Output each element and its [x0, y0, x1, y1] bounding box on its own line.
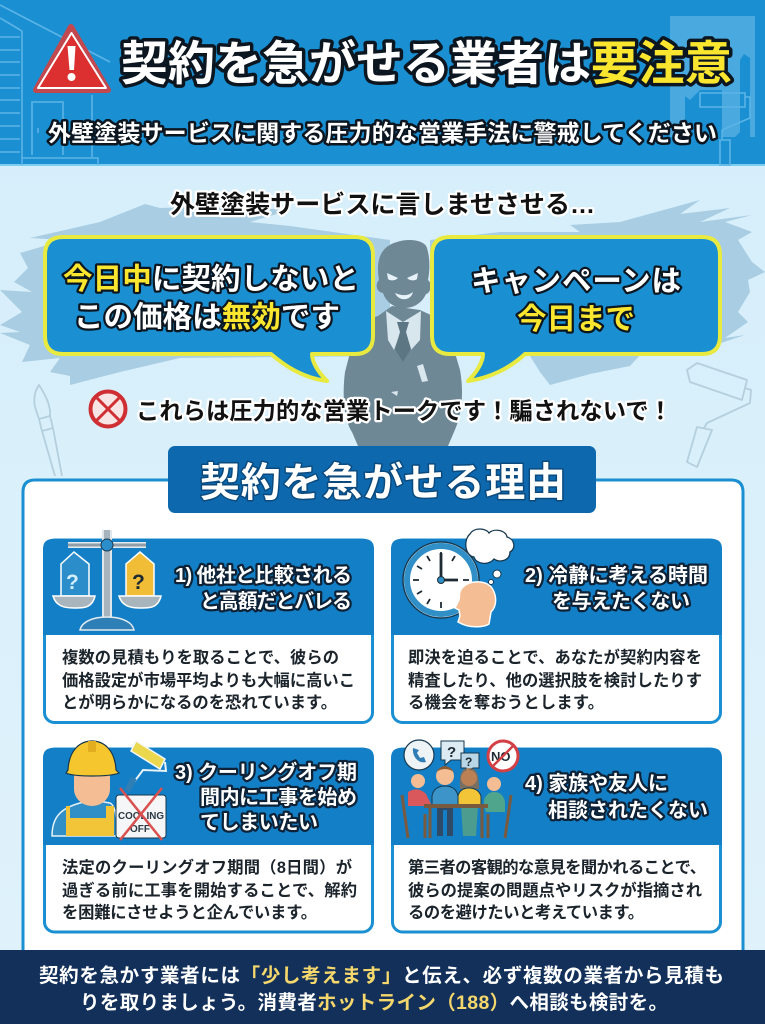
icon: warning triangle	[36, 27, 108, 90]
icon: balance scale	[53, 530, 161, 630]
icon: balance scale: ?	[132, 571, 145, 594]
card 4 body	[408, 858, 706, 922]
card 2 body: 精査したり、他の選択肢を検討したりす	[408, 671, 702, 690]
icon: paint brush outline	[34, 385, 62, 476]
card 3 title: てしまいたい	[200, 812, 318, 834]
card 3 body: 過ぎる前に工事を開始することで、解約	[62, 881, 357, 900]
subtitle: 外壁塗装サービスに関する圧力的な営業手法に警戒してください	[48, 120, 717, 146]
card 2 title: 2) 冷静に考える時間	[525, 564, 708, 587]
card 2 title	[525, 564, 708, 613]
card 3 title: 間内に工事を始め	[200, 786, 357, 809]
heading: reasons	[168, 446, 596, 513]
card 1 body	[62, 648, 355, 712]
card 2 body: 即決を迫ることで、あなたが契約内容を	[408, 648, 702, 667]
bubble text: right line 2: 今日まで	[517, 303, 635, 336]
bubble text: right line 1: キャンペーンは	[471, 265, 681, 298]
icon: clock with thinking head	[403, 529, 514, 627]
card 3 body: を困難にさせようと企んでいます。	[62, 903, 317, 922]
panel: header band	[0, 0, 765, 166]
card 2 title: を与えたくない	[552, 590, 690, 613]
card 4 body: るのを避けたいと考えています。	[408, 903, 644, 922]
card 1	[43, 530, 374, 722]
card 4 body: 彼らの提案の問題点やリスクが指摘され	[408, 881, 702, 900]
card 3	[43, 741, 374, 932]
icon: worker with roller and calendar: COOLING	[118, 811, 164, 822]
card 2	[391, 529, 722, 722]
card 2 body: る機会を奪おうとします。	[408, 693, 604, 712]
icon: worker with roller and calendar: OFF	[130, 824, 150, 835]
icon: balance scale: ?	[66, 571, 79, 594]
icon: paint roller outline	[687, 363, 751, 467]
icon: family discussion at table	[402, 740, 518, 838]
brush strokes background	[0, 200, 765, 385]
card 4	[391, 740, 722, 932]
card 3 title: 3) クーリングオフ期	[175, 760, 357, 784]
warning: red cross icon	[90, 392, 126, 426]
card 3 title	[175, 760, 357, 834]
intro line: 外壁塗装サービスに言しませさせる…	[170, 191, 595, 219]
card 1 body: とが明らかになるのを恐れています。	[62, 693, 337, 712]
warning text: これらは圧力的な営業トークです！騙されないで！	[136, 398, 672, 424]
bubble text: left line 2: この価格は無効です	[74, 301, 340, 334]
icon: family discussion at table: ?	[465, 755, 472, 769]
icon: family discussion at table: ?	[447, 744, 456, 761]
card 1 body: 複数の見積もりを取ることで、彼らの	[62, 648, 339, 667]
footer band	[0, 950, 765, 1024]
card 2 body	[408, 648, 702, 712]
card 1 title: 1) 他社と比較される	[175, 564, 352, 587]
card 4 body: 第三者の客観的な意見を聞かれることで、	[408, 858, 706, 877]
footer text line 1: 契約を急かす業者には「少し考えます」と伝え、必ず複数の業者から見積も	[39, 964, 724, 987]
speech bubble: left	[45, 237, 373, 381]
illustration: salesman silhouette	[344, 240, 462, 446]
bubble text: left line 1: 今日中に契約しないと	[63, 263, 359, 296]
card 4 title: 4) 家族や友人に	[525, 772, 668, 795]
icon: worker with roller and calendar	[52, 741, 166, 840]
title: 契約を急がせる業者は要注意	[121, 37, 732, 90]
card 4 title: 相談されたくない	[548, 799, 708, 822]
speech bubble: right	[432, 237, 720, 381]
heading: reasons: 契約を急がせる理由	[200, 461, 566, 505]
panel: reasons container	[23, 480, 743, 960]
icon: family discussion at table: NO	[491, 749, 510, 764]
card 1 title	[175, 564, 352, 613]
card 4 title	[525, 772, 708, 822]
card 1 title: と高額だとバレる	[200, 590, 352, 613]
footer text line 2: りを取りましょう。消費者ホットライン（188）へ相談も検討を。	[80, 992, 668, 1014]
card 1 body: 価格設定が市場平均よりも大幅に高いこ	[62, 671, 355, 690]
card 3 body	[62, 858, 357, 922]
card 3 body: 法定のクーリングオフ期間（8日間）が	[62, 858, 352, 877]
